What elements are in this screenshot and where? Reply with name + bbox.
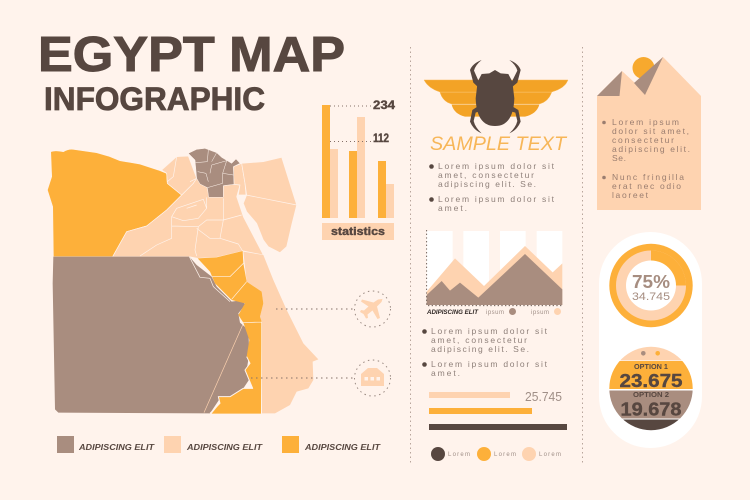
panel: pyramids (597, 57, 701, 210)
statistics bar chart: 234 (373, 98, 395, 112)
panel: white pill (599, 232, 702, 448)
donut chart: 34.745 (632, 291, 670, 303)
horizontal bars: 25.745 (525, 390, 562, 404)
map legend: ADIPISCING ELIT (186, 443, 263, 452)
peach area series (427, 246, 562, 305)
text block: scarab bullets: Lorem ipsum dolor sit (438, 161, 555, 171)
panel: pyramids: Lorem ipsum (612, 117, 679, 127)
title: INFOGRAPHIC (44, 81, 265, 117)
scarab body (470, 60, 521, 133)
text block: chart bullets: adipiscing elit. Se. (431, 344, 529, 354)
region: Nile valley orange (198, 251, 263, 414)
pyramid shape (597, 57, 701, 210)
panel: pyramids: consectetur (612, 135, 674, 145)
options circle: 19.678 (620, 398, 682, 420)
icon: building (354, 360, 390, 396)
area chart (427, 230, 563, 306)
bars legend (431, 447, 561, 461)
text block: chart bullets: amet, consectetur (431, 335, 527, 345)
region: Nile delta (188, 148, 240, 197)
text block: scarab bullets: amet, consectetur (438, 170, 534, 180)
text block: chart bullets: Lorem ipsum dolor sit (431, 326, 548, 336)
donut chart: 75% (632, 272, 670, 292)
bars legend: Lorem (448, 452, 470, 458)
panel: pyramids: laoreet (612, 190, 649, 200)
governorate borders (140, 157, 297, 413)
column divider lines (410, 47, 582, 465)
region: Red Sea strip (243, 252, 318, 413)
panel: pyramids: Nunc fringilla (612, 172, 684, 182)
connector lines (251, 309, 355, 378)
region: New Valley (53, 257, 250, 413)
map legend (57, 436, 381, 453)
text block: chart bullets: Lorem ipsum dolor sit (431, 359, 548, 369)
area chart legend: ipsum (486, 310, 504, 316)
panel: pyramids: erat nec odio (612, 181, 681, 191)
icon: sun (632, 57, 654, 79)
text block: chart bullets (422, 326, 548, 378)
heading: sample text: SAMPLE TEXT (430, 134, 567, 155)
region: canal strip (233, 163, 246, 195)
map legend: ADIPISCING ELIT (78, 443, 155, 452)
statistics bar chart: statistics (331, 226, 385, 238)
region: north-west peach (162, 156, 197, 195)
map legend: ADIPISCING ELIT (304, 443, 381, 452)
text block: scarab bullets: adipiscing elit. Se. (438, 179, 536, 189)
text block: chart bullets: amet. (431, 368, 460, 378)
statistics bar chart: 112 (373, 131, 389, 145)
text block: scarab bullets (429, 161, 555, 213)
area chart legend (426, 308, 561, 316)
region: western desert north (47, 149, 182, 257)
area chart legend: ADIPISCING ELIT (426, 309, 479, 316)
bars legend: Lorem (494, 452, 516, 458)
donut chart (609, 244, 693, 327)
options circle (609, 346, 693, 430)
area chart legend: ipsum (531, 310, 549, 316)
statistics bar chart (322, 98, 395, 240)
panel: pyramids: Se. (612, 153, 626, 163)
options circle: OPTION 2 (633, 392, 669, 399)
panel: pyramids: adipiscing elit. (612, 144, 690, 154)
panel: pyramids: dolor sit amet, (612, 126, 689, 136)
title: EGYPT MAP (38, 28, 345, 82)
options circle: 23.675 (620, 370, 682, 391)
horizontal bars (429, 390, 567, 430)
text block: scarab bullets: Lorem ipsum dolor sit (438, 194, 555, 204)
icon: airplane (354, 291, 390, 327)
region: Sinai (242, 157, 297, 253)
text block: scarab bullets: amet. (438, 203, 467, 213)
map of Egypt (47, 148, 318, 414)
title (38, 28, 345, 117)
scarab wings (424, 80, 568, 117)
options circle: OPTION 1 (634, 364, 668, 371)
region: central peach governorates (113, 178, 263, 258)
icon: winged scarab (424, 60, 568, 133)
bars legend: Lorem (539, 452, 561, 458)
brown area series (427, 254, 562, 305)
